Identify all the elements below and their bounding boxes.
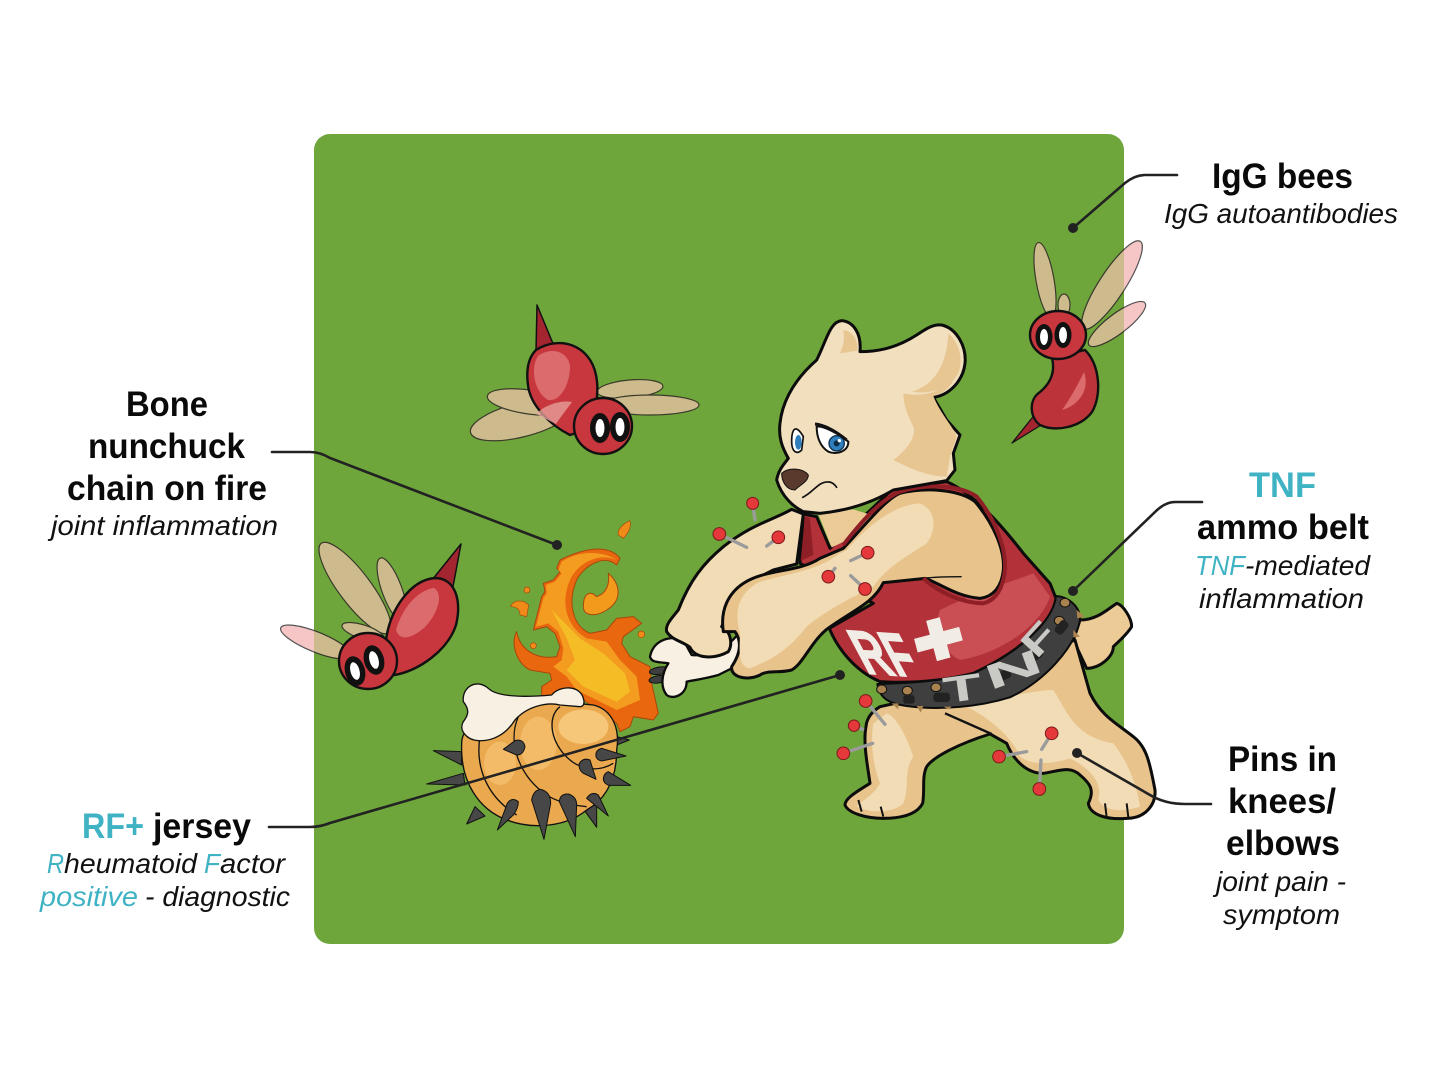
label: TNF ammo belt: TNF xyxy=(1249,466,1316,505)
icon: top centre IgG bee xyxy=(466,305,699,454)
label: Bone nunchuck chain on fire: nunchuck xyxy=(88,427,246,466)
icon: front spikes xyxy=(497,740,631,839)
label: Pins in knees/elbows: knees/ xyxy=(1228,782,1336,821)
label: IgG bees: IgG autoantibodies xyxy=(1164,198,1398,229)
icon: left IgG bee xyxy=(277,534,461,689)
panel: green illustration background xyxy=(314,134,1124,944)
label: Pins in knees/elbows: Pins in xyxy=(1228,740,1337,779)
jersey: armhole trim xyxy=(843,486,1005,603)
label: RF+ jersey: F xyxy=(204,848,222,879)
label: Pins in knees/elbows: joint pain - xyxy=(1212,866,1346,897)
label: RF+ jersey: - diagnostic xyxy=(145,881,290,912)
text: TNF on belt xyxy=(940,613,1065,711)
icon: back spikes xyxy=(427,737,629,827)
label: Pins in knees/elbows: elbows xyxy=(1226,824,1340,863)
label: Bone nunchuck chain on fire: Bone xyxy=(126,385,208,424)
label: Pins in knees/elbows xyxy=(1212,740,1346,930)
label: RF+ jersey: RF+ xyxy=(82,807,144,846)
icon: bullet belt xyxy=(877,596,1085,713)
icon: head xyxy=(777,321,965,513)
leader line: RF+ jersey xyxy=(269,670,845,827)
leader line: IgG bees xyxy=(1068,175,1177,233)
label: IgG bees xyxy=(1164,157,1398,229)
illustration: bear character xyxy=(650,321,1155,819)
label: Bone nunchuck chain on fire xyxy=(47,385,278,541)
chest showing between straps xyxy=(818,509,877,547)
label: TNF ammo belt: -mediated xyxy=(1245,550,1371,581)
label: Bone nunchuck chain on fire: chain on fire xyxy=(67,469,267,508)
leader line: TNF ammo belt xyxy=(1068,502,1202,596)
icon: orange spiked ball xyxy=(462,703,617,826)
icon: bone handle xyxy=(650,632,741,697)
label: RF+ jersey: jersey xyxy=(152,807,252,846)
text: RF+ on jersey: RF xyxy=(837,617,930,691)
label: IgG bees: IgG bees xyxy=(1212,157,1353,196)
icon: back arm xyxy=(666,509,803,657)
icon: pins in arms, knees and elbows xyxy=(713,497,1058,795)
leader line: bone nunchuck xyxy=(272,452,562,550)
label: TNF ammo belt: TNF xyxy=(1195,550,1247,581)
jersey: red RF+ top xyxy=(800,482,1056,691)
icon: flaming spiked flail with bone xyxy=(427,521,671,839)
label: TNF ammo belt: inflammation xyxy=(1199,583,1364,614)
icon: right IgG bee xyxy=(1012,234,1151,443)
label: RF+ jersey xyxy=(39,807,290,912)
icon: bone on ball xyxy=(462,684,584,741)
icon: tail xyxy=(1073,603,1132,668)
text: TNF on belt: N xyxy=(979,642,1048,698)
label: RF+ jersey: positive xyxy=(39,881,138,912)
label: RF+ jersey: R xyxy=(47,848,64,879)
label: TNF ammo belt xyxy=(1195,466,1371,614)
label: TNF ammo belt: ammo belt xyxy=(1197,508,1369,547)
icon: legs xyxy=(845,640,1155,819)
text: TNF on belt: T xyxy=(940,665,984,711)
label: Pins in knees/elbows: symptom xyxy=(1223,899,1340,930)
icon: flame xyxy=(511,521,658,732)
icon: chain xyxy=(649,666,671,684)
label: Bone nunchuck chain on fire: joint inflammation xyxy=(47,510,278,541)
text: TNF on belt: F xyxy=(1012,613,1065,665)
label: RF+ jersey: heumatoid xyxy=(64,848,198,879)
icon: front arm and shoulder xyxy=(723,490,1003,678)
label: RF+ jersey: actor xyxy=(220,848,287,879)
leader line: pins xyxy=(1072,748,1211,804)
